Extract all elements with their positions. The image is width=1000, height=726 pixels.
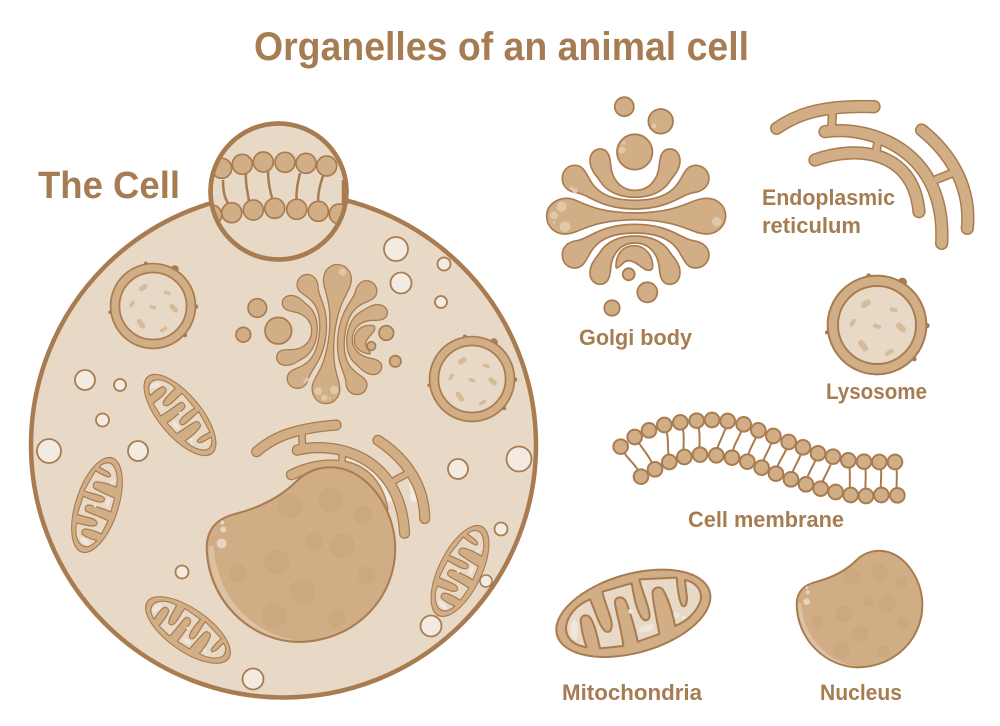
lysosome in cell, left <box>108 262 198 348</box>
label line 2: reticulum <box>762 213 861 238</box>
label: Cell membrane <box>688 507 844 532</box>
panel: lysosome <box>825 273 930 404</box>
mitochondrion in cell, upper left <box>126 355 234 475</box>
panel: mitochondria <box>546 554 720 705</box>
er shape <box>777 107 968 243</box>
cell body <box>31 192 536 698</box>
vesicles in the cytoplasm <box>37 237 532 690</box>
endoplasmic reticulum in cell <box>255 417 426 548</box>
lipid bilayer <box>613 413 905 503</box>
lysosome in cell, right <box>427 335 517 421</box>
label: Mitochondria <box>562 680 703 705</box>
vesicle highlights <box>618 124 656 154</box>
nucleus in cell <box>207 467 395 642</box>
panel: endoplasmic reticulum <box>762 107 968 243</box>
heading: The Cell: The Cell <box>38 165 180 207</box>
mitochondrion in cell, right <box>402 507 518 635</box>
lysosome shape <box>825 273 930 374</box>
label: Lysosome <box>826 379 927 404</box>
golgi vesicles <box>604 97 673 316</box>
golgi shape <box>547 149 726 284</box>
panel: nucleus <box>797 551 922 705</box>
panel: golgi body <box>547 97 726 350</box>
mitochondrion in cell, bottom <box>126 570 250 690</box>
title: Organelles of an animal cell <box>254 25 749 69</box>
mitochondrion in cell, left <box>42 440 152 570</box>
golgi body in cell <box>236 259 401 409</box>
mitochondrion shape <box>546 554 720 673</box>
panel: cell membrane <box>613 413 905 532</box>
small vesicle over mitochondrion <box>480 575 492 587</box>
label: Golgi body <box>579 325 693 350</box>
nucleus shape <box>797 551 922 667</box>
label: Nucleus <box>820 680 902 705</box>
label line 1: Endoplasmic <box>762 185 895 210</box>
panel: the cell diagram <box>31 124 536 698</box>
magnified membrane circle <box>202 124 349 260</box>
